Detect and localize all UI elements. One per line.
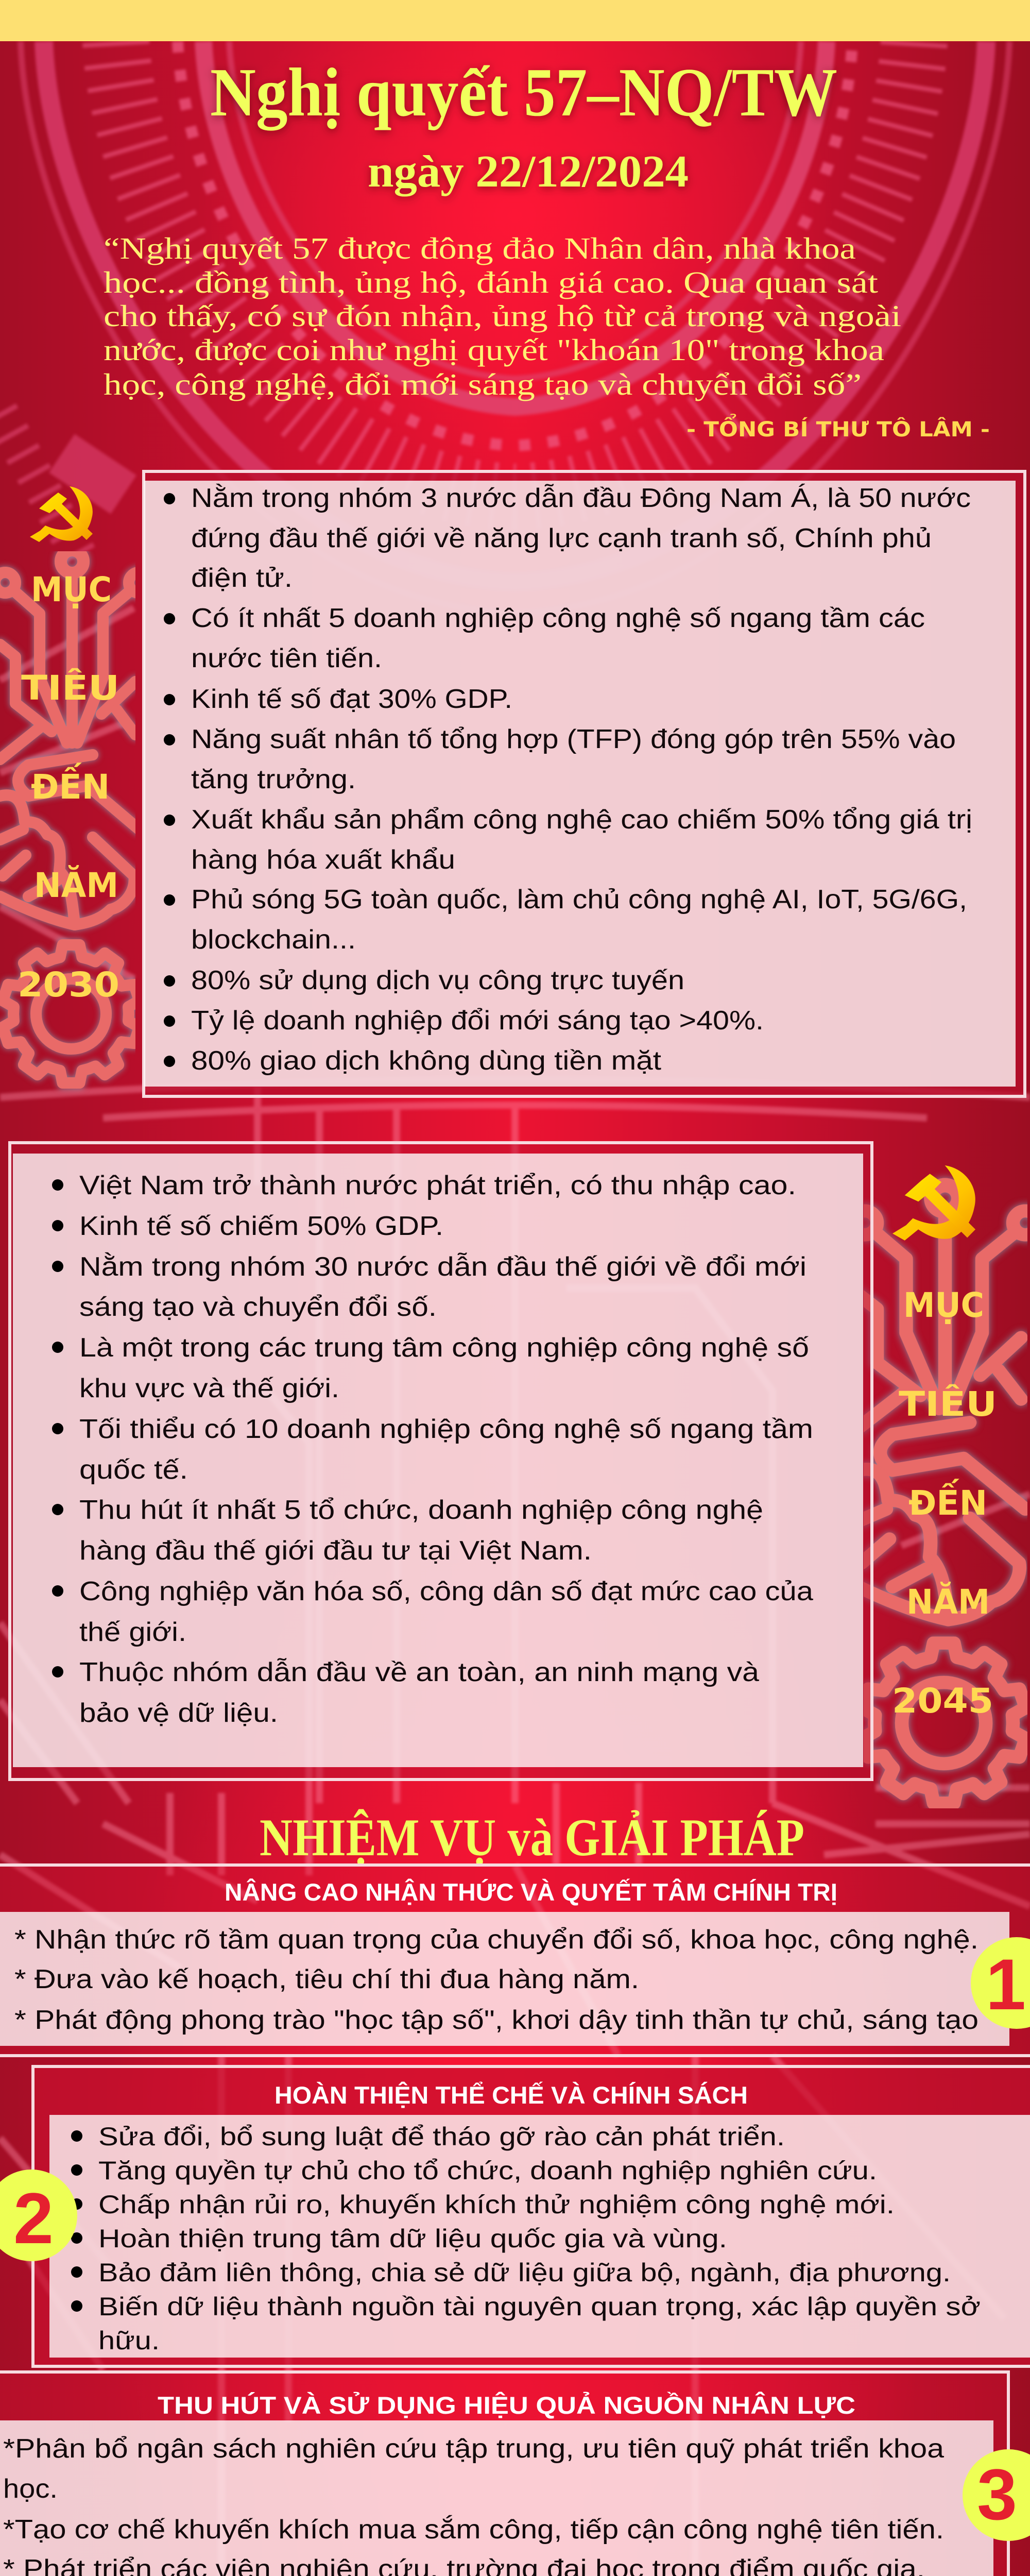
quote: cho thấy, có sự đón nhận, ủng hộ từ cả trong và ngoài xyxy=(104,299,901,333)
label: target 2045 xyxy=(892,1285,997,1721)
label: target 2030: ĐẾN xyxy=(31,762,110,807)
panel: targets 2045: Thu hút ít nhất 5 tổ chức, doanh nghiệp công nghệ xyxy=(79,1495,763,1525)
panel: targets 2030: Phủ sóng 5G toàn quốc, làm chủ công nghệ AI, IoT, 5G/6G, xyxy=(191,885,967,914)
section 3 heading: THU HÚT VÀ SỬ DỤNG HIỆU QUẢ NGUỒN NHÂN LỰC xyxy=(158,2392,855,2419)
panel: section 2: Biến dữ liệu thành nguồn tài nguyên quan trọng, xác lập quyền sở xyxy=(98,2292,981,2321)
panel: targets 2045: Kinh tế số chiếm 50% GDP. xyxy=(79,1211,443,1241)
panel: targets 2045: quốc tế. xyxy=(79,1455,188,1485)
quote: học... đồng tình, ủng hộ, đánh giá cao. Qua quan sát xyxy=(104,265,879,299)
panel: section 1: * Phát động phong trào "học tập số", khơi dậy tinh thần tự chủ, sáng tạo xyxy=(14,2005,978,2035)
quote attribution: - TỔNG BÍ THƯ TÔ LÂM - xyxy=(686,413,990,442)
date subtitle: ngày 22/12/2024 xyxy=(368,147,689,197)
panel: targets 2030: blockchain... xyxy=(191,925,356,955)
panel: targets 2030: Nằm trong nhóm 3 nước dẫn đầu Đông Nam Á, là 50 nước xyxy=(191,483,971,513)
section 1 heading: NÂNG CAO NHẬN THỨC VÀ QUYẾT TÂM CHÍNH TRỊ xyxy=(225,1878,837,1906)
panel: targets 2045: Là một trong các trung tâm công nghiệp công nghệ số xyxy=(79,1333,809,1363)
panel: targets 2045: khu vực và thế giới. xyxy=(79,1374,339,1403)
panel: targets 2030: nước tiên tiến. xyxy=(191,643,382,673)
panel: targets 2030: 80% sử dụng dịch vụ công trực tuyến xyxy=(191,965,684,995)
panel: targets 2030: điện tử. xyxy=(191,563,293,593)
panel: targets 2030: Xuất khẩu sản phẩm công nghệ cao chiếm 50% tổng giá trị xyxy=(191,805,972,835)
top band xyxy=(0,0,1030,41)
panel: targets 2045: sáng tạo và chuyển đổi số. xyxy=(79,1292,437,1322)
panel: targets 2045: thế giới. xyxy=(79,1617,186,1647)
panel: targets 2030: Năng suất nhân tố tổng hợp (TFP) đóng góp trên 55% vào xyxy=(191,724,956,754)
panel: section 1 xyxy=(0,1865,1030,2056)
badge 2: 2 xyxy=(13,2178,54,2259)
panel: targets 2030: tăng trưởng. xyxy=(191,765,356,794)
panel: targets 2030: Có ít nhất 5 doanh nghiệp công nghệ số ngang tầm các xyxy=(191,603,925,633)
panel: targets 2045: Thuộc nhóm dẫn đầu về an toàn, an ninh mạng và xyxy=(79,1657,759,1687)
heading: tasks and solutions: NHIỆM VỤ và GIẢI PHÁP xyxy=(260,1808,804,1867)
panel: section 2: Bảo đảm liên thông, chia sẻ dữ liệu giữa bộ, ngành, địa phương. xyxy=(98,2258,951,2287)
panel: section 3: *Phân bổ ngân sách nghiên cứu tập trung, ưu tiên quỹ phát triển khoa xyxy=(3,2434,944,2464)
badge 2 xyxy=(0,2170,77,2261)
label: target 2030: 2030 xyxy=(18,965,119,1005)
panel: targets 2045: Nằm trong nhóm 30 nước dẫn đầu thế giới về đổi mới xyxy=(79,1252,806,1282)
label: target 2045: TIÊU xyxy=(899,1384,997,1424)
panel: section 1: * Nhận thức rõ tầm quan trọng của chuyển đổi số, khoa học, công nghệ. xyxy=(14,1925,978,1955)
panel: section 3: *Tạo cơ chế khuyến khích mua sắm công, tiếp cận công nghệ tiên tiến. xyxy=(3,2515,944,2545)
title: Nghị quyết 57–NQ/TW xyxy=(210,54,837,131)
panel: targets 2045: bảo vệ dữ liệu. xyxy=(79,1698,278,1728)
panel: targets 2030: đứng đầu thế giới về năng lực cạnh tranh số, Chính phủ xyxy=(191,523,932,553)
panel: section 1: * Đưa vào kế hoạch, tiêu chí thi đua hàng năm. xyxy=(14,1964,639,1994)
icon: circuit and gear 2030 xyxy=(0,550,149,1083)
icon: hammer and sickle 2045 xyxy=(892,1165,975,1241)
panel: section 2: Sửa đổi, bổ sung luật để tháo gỡ rào cản phát triển. xyxy=(98,2122,785,2151)
panel: targets 2030: Kinh tế số đạt 30% GDP. xyxy=(191,684,512,714)
panel: targets 2030 xyxy=(144,471,1025,1096)
icon: hammer and sickle 2030 xyxy=(30,486,93,542)
badge 1 xyxy=(971,1937,1030,2029)
panel: section 2: Chấp nhận rủi ro, khuyến khích thử nghiệm công nghệ mới. xyxy=(98,2190,895,2219)
panel: targets 2045: Công nghiệp văn hóa số, công dân số đạt mức cao của xyxy=(79,1577,813,1606)
panel: section 3: học. xyxy=(3,2474,58,2504)
label: target 2030 xyxy=(18,570,119,1005)
label: target 2030: NĂM xyxy=(34,865,118,905)
badge 3 xyxy=(963,2449,1030,2541)
quote xyxy=(104,231,901,401)
section 2 heading: HOÀN THIỆN THỂ CHẾ VÀ CHÍNH SÁCH xyxy=(274,2081,748,2109)
label: target 2045: MỤC xyxy=(903,1285,984,1325)
panel: targets 2045 xyxy=(10,1143,872,1780)
label: target 2045: 2045 xyxy=(892,1681,993,1721)
panel: targets 2045: Tối thiểu có 10 doanh nghiệp công nghệ số ngang tầm xyxy=(79,1414,813,1444)
quote: “Nghị quyết 57 được đông đảo Nhân dân, nhà khoa xyxy=(104,231,856,265)
panel: section 2 xyxy=(0,2066,1030,2366)
panel: targets 2030: Tỷ lệ doanh nghiệp đổi mới sáng tạo >40%. xyxy=(191,1006,764,1036)
panel: section 2: Tăng quyền tự chủ cho tổ chức, doanh nghiệp nghiên cứu. xyxy=(98,2156,877,2185)
label: target 2045: ĐẾN xyxy=(908,1479,987,1523)
icon: circuit and gear 2045 xyxy=(852,1185,1030,1803)
label: target 2030: MỤC xyxy=(31,570,112,609)
panel: targets 2030: hàng hóa xuất khẩu xyxy=(191,845,455,875)
label: target 2030: TIÊU xyxy=(21,668,119,708)
quote: nước, được coi như nghị quyết "khoán 10" trong khoa xyxy=(104,333,884,367)
badge 3: 3 xyxy=(977,2454,1017,2535)
panel: targets 2030: 80% giao dịch không dùng tiền mặt xyxy=(191,1046,662,1076)
panel: section 3 xyxy=(0,2372,1030,2576)
panel: section 2: hữu. xyxy=(98,2326,160,2355)
panel: section 2: Hoàn thiện trung tâm dữ liệu quốc gia và vùng. xyxy=(98,2224,727,2253)
badge 1: 1 xyxy=(986,1944,1026,2025)
panel: targets 2045: hàng đầu thế giới đầu tư tại Việt Nam. xyxy=(79,1536,592,1566)
panel: targets 2045: Việt Nam trở thành nước phát triển, có thu nhập cao. xyxy=(79,1171,796,1200)
label: target 2045: NĂM xyxy=(906,1582,990,1622)
quote: học, công nghệ, đổi mới sáng tạo và chuyển đổi số” xyxy=(104,367,862,401)
